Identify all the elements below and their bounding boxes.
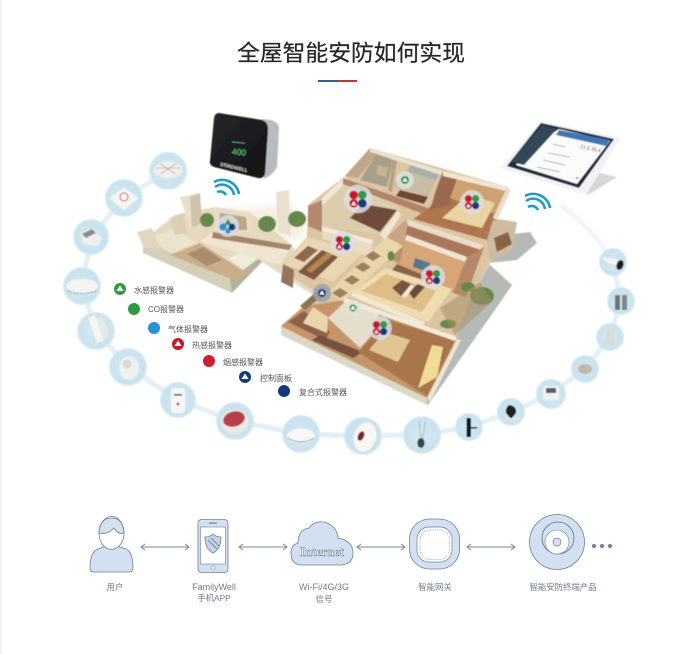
device chain connector bbox=[82, 171, 621, 436]
flow: internet cloud icon: Internet bbox=[300, 545, 345, 559]
flow: phone app icon bbox=[198, 520, 228, 572]
room sensor badges bbox=[217, 171, 484, 340]
arrow: internet to gateway bbox=[357, 544, 405, 550]
master bedroom badge bbox=[460, 190, 484, 214]
flow labels: 智能网关 bbox=[418, 582, 452, 592]
arrow: user to app bbox=[141, 544, 189, 550]
left edge tint bbox=[0, 0, 2, 654]
flow labels: Wi-Fi/4G/3G bbox=[299, 582, 349, 592]
legend bbox=[114, 283, 347, 397]
device 3: sensor head bbox=[73, 219, 109, 255]
device 2: panel detector bbox=[105, 179, 143, 217]
flow labels: 手机APP bbox=[197, 593, 231, 603]
ellipsis dots bbox=[592, 544, 612, 548]
lower bath badge bbox=[345, 300, 361, 316]
device 6: motion sensor bbox=[109, 348, 147, 386]
wall-mounted gas sensor device: 400 bbox=[231, 146, 247, 158]
soft backdrop bbox=[175, 205, 310, 250]
title underline bbox=[318, 80, 357, 82]
flow labels: 信号 bbox=[316, 594, 332, 604]
master bedroom bbox=[413, 177, 511, 240]
legend: smoke alarm bbox=[203, 355, 263, 367]
flow: terminal product icon bbox=[530, 514, 584, 570]
study room bbox=[320, 182, 398, 235]
legend: water alarm: 水感报警器 bbox=[134, 285, 174, 295]
tablet app bbox=[500, 121, 621, 195]
flow labels bbox=[107, 582, 596, 604]
legend: gas alarm: 气体报警器 bbox=[168, 324, 208, 334]
device 10: remote control bbox=[344, 417, 382, 455]
living badge bbox=[421, 265, 445, 289]
garden plants bbox=[388, 251, 494, 328]
floor plan: isometric house bbox=[137, 148, 537, 405]
corridor with diamond tiles bbox=[328, 237, 403, 302]
living room bbox=[353, 268, 452, 322]
arrow: gateway to products bbox=[467, 544, 515, 550]
plants bbox=[200, 211, 306, 232]
legend: control panel bbox=[239, 371, 292, 383]
device 14: control panel bbox=[536, 379, 566, 409]
device 7: smart socket bbox=[160, 382, 196, 418]
house shadow bbox=[420, 232, 537, 405]
dining room bbox=[283, 237, 363, 282]
arrow: app to internet bbox=[239, 544, 287, 550]
legend: control panel: 控制面板 bbox=[260, 373, 292, 383]
wall-mounted gas sensor device: STIRDWELL bbox=[219, 162, 248, 174]
flow labels: 用户 bbox=[107, 582, 123, 592]
study badge bbox=[344, 185, 372, 213]
left wing rooms bbox=[170, 243, 247, 280]
device 4: ceiling alarm bbox=[63, 267, 101, 305]
flow labels: 智能安防终端产品 bbox=[530, 582, 596, 592]
legend: CO alarm: CO报警器 bbox=[148, 304, 184, 314]
legend: heat alarm bbox=[172, 338, 232, 350]
device 8: red emergency button bbox=[216, 402, 254, 440]
device 18: camera tube bbox=[599, 248, 627, 276]
flow: internet cloud icon bbox=[291, 522, 353, 565]
device 9: round sensor bbox=[282, 415, 320, 453]
wall-mounted gas sensor device bbox=[210, 113, 279, 179]
left wing floor bbox=[143, 207, 318, 292]
device 15: pebble sensor bbox=[571, 355, 599, 383]
lower block rooms bbox=[288, 311, 330, 340]
legend: gas alarm bbox=[148, 322, 208, 334]
left wing towers bbox=[180, 193, 202, 228]
device 16: white sensor bbox=[596, 323, 624, 351]
legend: composite alarm: 复合式报警器 bbox=[299, 387, 347, 397]
lower bedroom badge bbox=[368, 316, 392, 340]
lower block base bbox=[281, 300, 457, 399]
wifi signal: sensor bbox=[214, 180, 239, 195]
legend: CO alarm bbox=[128, 303, 184, 315]
device 13: camera bbox=[497, 398, 525, 426]
legend: composite alarm bbox=[278, 385, 347, 397]
control panel badge bbox=[313, 284, 331, 302]
legend: water alarm bbox=[114, 283, 174, 295]
upper bath rooms bbox=[360, 153, 393, 187]
device 17: twin sensors bbox=[607, 287, 635, 315]
device ring bbox=[63, 152, 635, 455]
flow labels: FamilyWell bbox=[192, 582, 236, 592]
flow: user icon bbox=[90, 516, 133, 572]
flow: smart gateway icon bbox=[410, 519, 460, 569]
left wing front wall bbox=[143, 240, 232, 293]
device 11: pendant bbox=[403, 416, 441, 454]
kitchen badge bbox=[217, 215, 239, 237]
dining badge bbox=[331, 231, 355, 255]
device 5: door sensor bbox=[77, 312, 115, 350]
legend: smoke alarm: 烟感报警器 bbox=[223, 357, 263, 367]
legend: heat alarm: 热感报警器 bbox=[192, 340, 232, 350]
device 12: door lock bbox=[455, 413, 483, 441]
tablet app: 21.5 35.4 bbox=[580, 144, 601, 154]
TV room bbox=[387, 220, 483, 293]
main block base bbox=[281, 148, 517, 398]
device 1: smoke alarm bbox=[149, 152, 187, 190]
bath badge bbox=[396, 171, 414, 189]
title: 全屋智能安防如何实现 bbox=[237, 40, 465, 66]
wifi signal: tablet bbox=[525, 194, 550, 210]
